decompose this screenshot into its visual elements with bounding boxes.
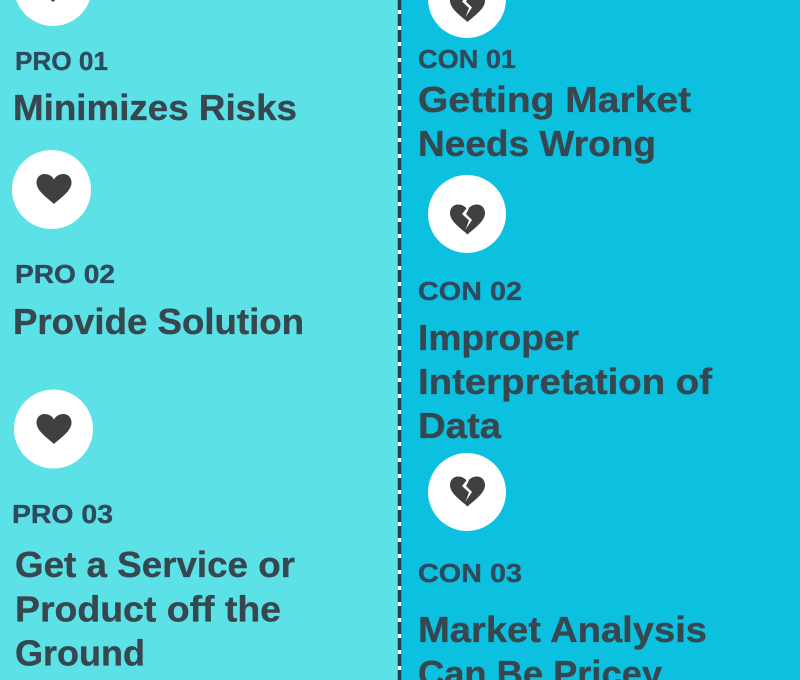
heading: minimizes risks: Minimizes Risks xyxy=(13,87,297,128)
label: pro 02: PRO 02 xyxy=(15,259,115,289)
heading: get a service or product off the ground: Get a Service or xyxy=(15,544,295,585)
heading: improper interpretation of data: Improper xyxy=(418,317,579,358)
heading: getting market needs wrong: Getting Market xyxy=(418,79,691,120)
heading: improper interpretation of data: Interpretation of xyxy=(418,361,713,402)
heading: market analysis can be pricey: Market Analysis xyxy=(418,609,707,650)
heading: getting market needs wrong: Needs Wrong xyxy=(418,123,656,164)
icon: con 02 broken heart xyxy=(428,175,506,253)
heading: improper interpretation of data: Data xyxy=(418,405,502,446)
icon: pro 03 heart xyxy=(14,390,93,468)
heading: getting market needs wrong xyxy=(418,79,691,164)
panel: pros xyxy=(0,0,399,680)
heading: get a service or product off the ground: Product off the xyxy=(15,588,281,630)
heading: get a service or product off the ground xyxy=(15,544,295,674)
icon: con 01 broken heart xyxy=(428,0,506,38)
icon: pro 02 heart xyxy=(12,150,91,229)
label: con 02: CON 02 xyxy=(418,276,522,306)
heading: market analysis can be pricey xyxy=(418,609,707,680)
heading: improper interpretation of data xyxy=(418,317,713,446)
label: pro 01: PRO 01 xyxy=(15,46,108,76)
icon: pro 01 heart xyxy=(14,0,92,26)
panel: cons xyxy=(399,0,800,680)
label: con 01: CON 01 xyxy=(418,44,516,74)
label: con 03: CON 03 xyxy=(418,558,522,588)
heading: get a service or product off the ground: Ground xyxy=(15,632,145,674)
heading: provide solution: Provide Solution xyxy=(13,301,304,342)
icon: con 03 broken heart xyxy=(428,453,506,531)
divider xyxy=(398,0,401,680)
label: pro 03: PRO 03 xyxy=(12,499,113,529)
